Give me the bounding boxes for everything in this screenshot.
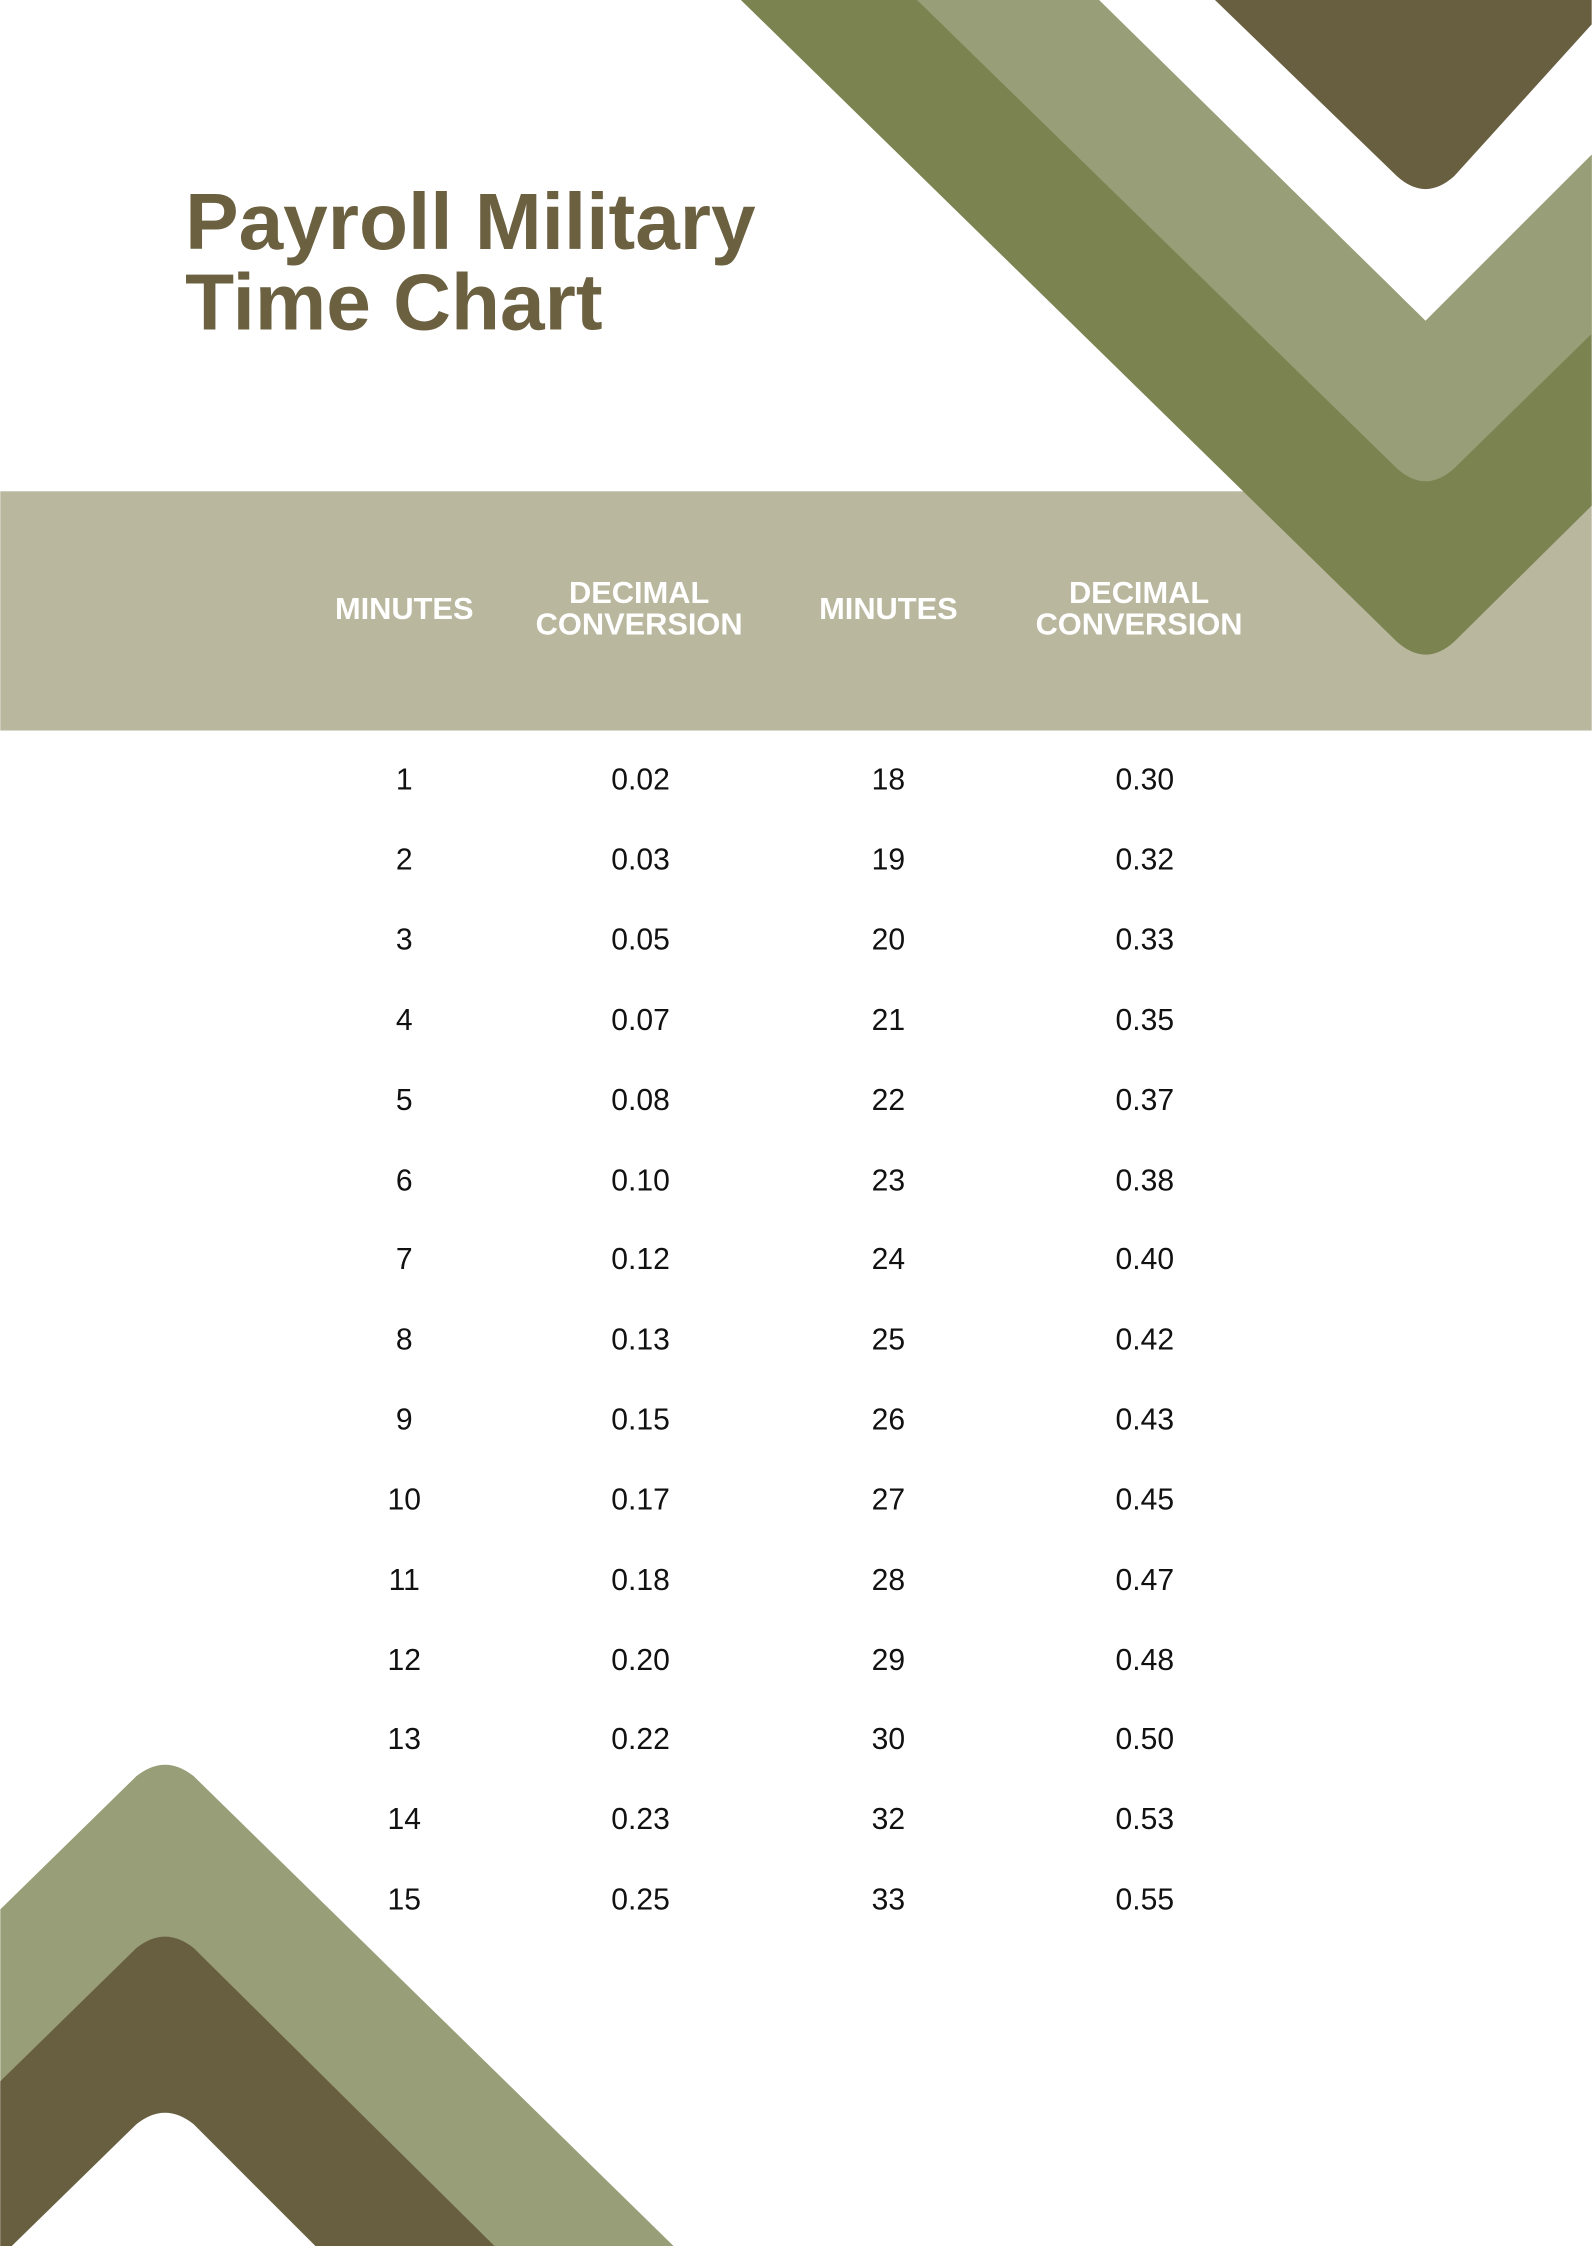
- table header labels: CONVERSION: [536, 607, 743, 642]
- table rows: 8: [396, 1323, 413, 1356]
- table rows: 0.23: [611, 1803, 670, 1836]
- table rows: 30: [872, 1723, 905, 1756]
- header band: [0, 491, 1592, 731]
- table rows: 0.32: [1116, 843, 1174, 876]
- table rows: 10: [388, 1484, 421, 1517]
- table rows: 0.48: [1116, 1644, 1174, 1677]
- table rows: 2: [396, 843, 413, 876]
- table rows: 0.43: [1116, 1404, 1174, 1437]
- table header labels: CONVERSION: [1036, 607, 1243, 642]
- table rows: 0.33: [1116, 924, 1174, 957]
- table rows: 12: [388, 1644, 421, 1677]
- table rows: 7: [396, 1243, 413, 1276]
- table rows: 0.40: [1116, 1243, 1174, 1276]
- table rows: 0.18: [611, 1564, 670, 1597]
- table header labels: DECIMAL: [1069, 575, 1209, 610]
- table rows: 20: [872, 924, 905, 957]
- table rows: 0.08: [611, 1084, 670, 1117]
- table rows: 27: [872, 1484, 905, 1517]
- table rows: 22: [872, 1084, 905, 1117]
- table rows: 0.50: [1116, 1723, 1174, 1756]
- table rows: 0.45: [1116, 1484, 1174, 1517]
- table rows: 0.47: [1116, 1564, 1174, 1597]
- table rows: 28: [872, 1564, 905, 1597]
- table header labels: MINUTES: [335, 591, 473, 626]
- table rows: 0.07: [611, 1004, 670, 1037]
- table header labels: DECIMAL: [569, 575, 709, 610]
- table rows: 0.22: [611, 1723, 670, 1756]
- table rows: 9: [396, 1404, 413, 1437]
- table rows: 0.12: [611, 1243, 670, 1276]
- table rows: 0.37: [1116, 1084, 1174, 1117]
- table rows: 0.20: [611, 1644, 670, 1677]
- table rows: 5: [396, 1084, 413, 1117]
- table rows: 15: [388, 1883, 421, 1916]
- table rows: 0.55: [1116, 1883, 1174, 1916]
- table rows: 0.13: [611, 1323, 670, 1356]
- table rows: 0.03: [611, 843, 670, 876]
- table rows: 0.10: [611, 1164, 670, 1197]
- title: [185, 176, 756, 346]
- table rows: 11: [389, 1564, 420, 1597]
- table rows: 0.35: [1116, 1004, 1174, 1037]
- table rows: 26: [872, 1404, 905, 1437]
- table rows: 0.30: [1116, 763, 1174, 796]
- title: Payroll Military: [185, 176, 756, 266]
- decoration: bottom-left chevrons: [0, 1765, 674, 2246]
- title: Time Chart: [185, 256, 603, 346]
- table rows: 0.53: [1116, 1803, 1174, 1836]
- table rows: 0.05: [611, 924, 670, 957]
- table rows: 4: [396, 1004, 413, 1037]
- table rows: 0.15: [611, 1404, 670, 1437]
- table rows: 32: [872, 1803, 905, 1836]
- table rows: 0.17: [611, 1484, 670, 1517]
- table rows: 1: [396, 763, 413, 796]
- table rows: 29: [872, 1644, 905, 1677]
- table rows: 21: [872, 1004, 905, 1037]
- table rows: [388, 763, 1174, 1916]
- table rows: 23: [872, 1164, 905, 1197]
- table rows: 0.25: [611, 1883, 670, 1916]
- table header labels: [335, 575, 1243, 642]
- table rows: 19: [872, 843, 905, 876]
- table rows: 3: [396, 924, 413, 957]
- table rows: 0.02: [611, 763, 670, 796]
- table rows: 18: [872, 763, 905, 796]
- table header labels: MINUTES: [819, 591, 958, 626]
- table rows: 0.38: [1116, 1164, 1174, 1197]
- table rows: 33: [872, 1883, 905, 1916]
- table rows: 25: [872, 1323, 905, 1356]
- table rows: 14: [388, 1803, 421, 1836]
- table rows: 13: [388, 1723, 421, 1756]
- table rows: 0.42: [1116, 1323, 1174, 1356]
- table rows: 6: [396, 1164, 413, 1197]
- decoration: top-right chevrons: [741, 0, 1592, 655]
- table rows: 24: [872, 1243, 905, 1276]
